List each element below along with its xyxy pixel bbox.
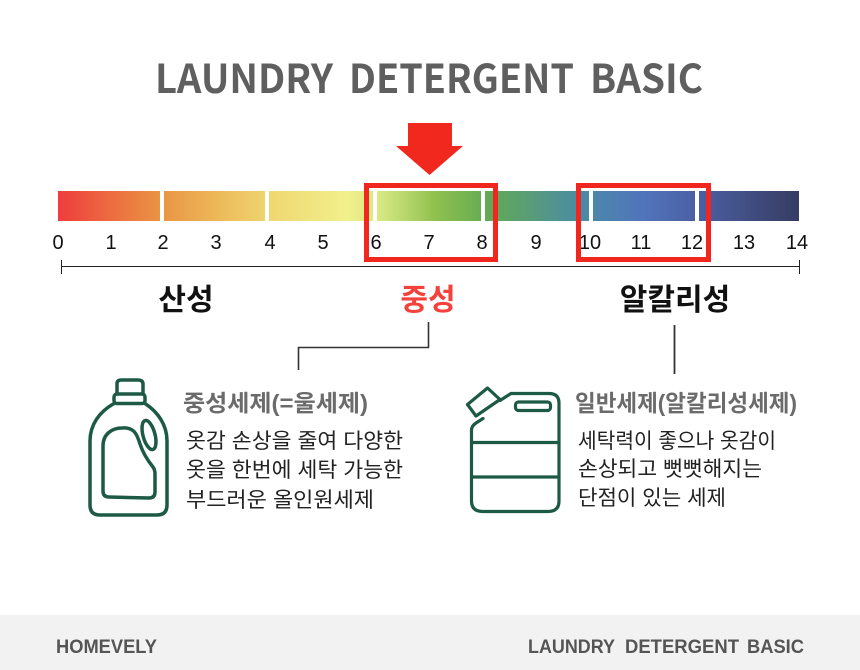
connector: alkaline	[674, 325, 676, 374]
title: DETERGENT	[349, 47, 574, 105]
footer title: DETERGENT	[625, 637, 739, 658]
connector: neutral	[298, 322, 428, 370]
pH gradient bar	[58, 191, 799, 221]
title: BASIC	[590, 47, 703, 105]
pH scale numbers	[52, 232, 808, 254]
footer title: LAUNDRY	[528, 637, 615, 658]
pH scale numbers: 9	[530, 232, 542, 254]
pH scale numbers: 2	[157, 232, 169, 254]
footer band	[0, 615, 860, 670]
footer title	[528, 637, 804, 658]
pH scale numbers: 11	[631, 232, 651, 254]
pH scale numbers: 7	[423, 232, 435, 254]
pH scale numbers: 14	[786, 232, 808, 254]
label: neutral: 중성	[400, 284, 456, 317]
pH scale numbers: 5	[317, 232, 329, 254]
text: neutral detergent description	[186, 430, 403, 512]
red highlight box: neutral range	[366, 186, 496, 260]
title	[155, 47, 703, 105]
label: acidic: 산성	[158, 284, 214, 317]
pH scale numbers: 3	[210, 232, 222, 254]
pH scale numbers: 0	[52, 232, 64, 254]
pH scale numbers: 6	[370, 232, 382, 254]
label: alkaline: 알칼리성	[620, 284, 730, 317]
text: neutral detergent description: 부드러운 올인원세제	[186, 489, 374, 512]
footer brand: HOMEVELY	[56, 637, 157, 658]
pH scale numbers: 8	[476, 232, 488, 254]
red highlight box: alkaline range	[578, 186, 708, 260]
pH scale numbers: 13	[733, 232, 755, 254]
icon: jerry can	[468, 388, 559, 512]
pH scale numbers: 4	[264, 232, 276, 254]
text: general detergent description: 세탁력이 좋으나 옷감이	[578, 430, 776, 453]
title: LAUNDRY	[155, 47, 334, 105]
axis range line	[62, 260, 800, 274]
heading: neutral detergent: 중성세제(=울세제)	[183, 390, 368, 416]
text: general detergent description: 단점이 있는 세제	[578, 487, 726, 510]
text: general detergent description: 손상되고 뻣뻣해지는	[578, 458, 762, 481]
text: neutral detergent description: 옷을 한번에 세탁 가능한	[186, 459, 403, 482]
icon: detergent bottle	[90, 380, 167, 515]
footer title: BASIC	[747, 637, 804, 658]
red down arrow	[396, 123, 463, 175]
heading: general detergent: 일반세제(알칼리성세제)	[575, 390, 797, 416]
text: general detergent description	[578, 430, 776, 510]
pH scale numbers: 12	[681, 232, 703, 254]
pH scale numbers: 1	[105, 232, 117, 254]
text: neutral detergent description: 옷감 손상을 줄여 다양한	[186, 430, 403, 453]
pH scale numbers: 10	[579, 232, 601, 254]
